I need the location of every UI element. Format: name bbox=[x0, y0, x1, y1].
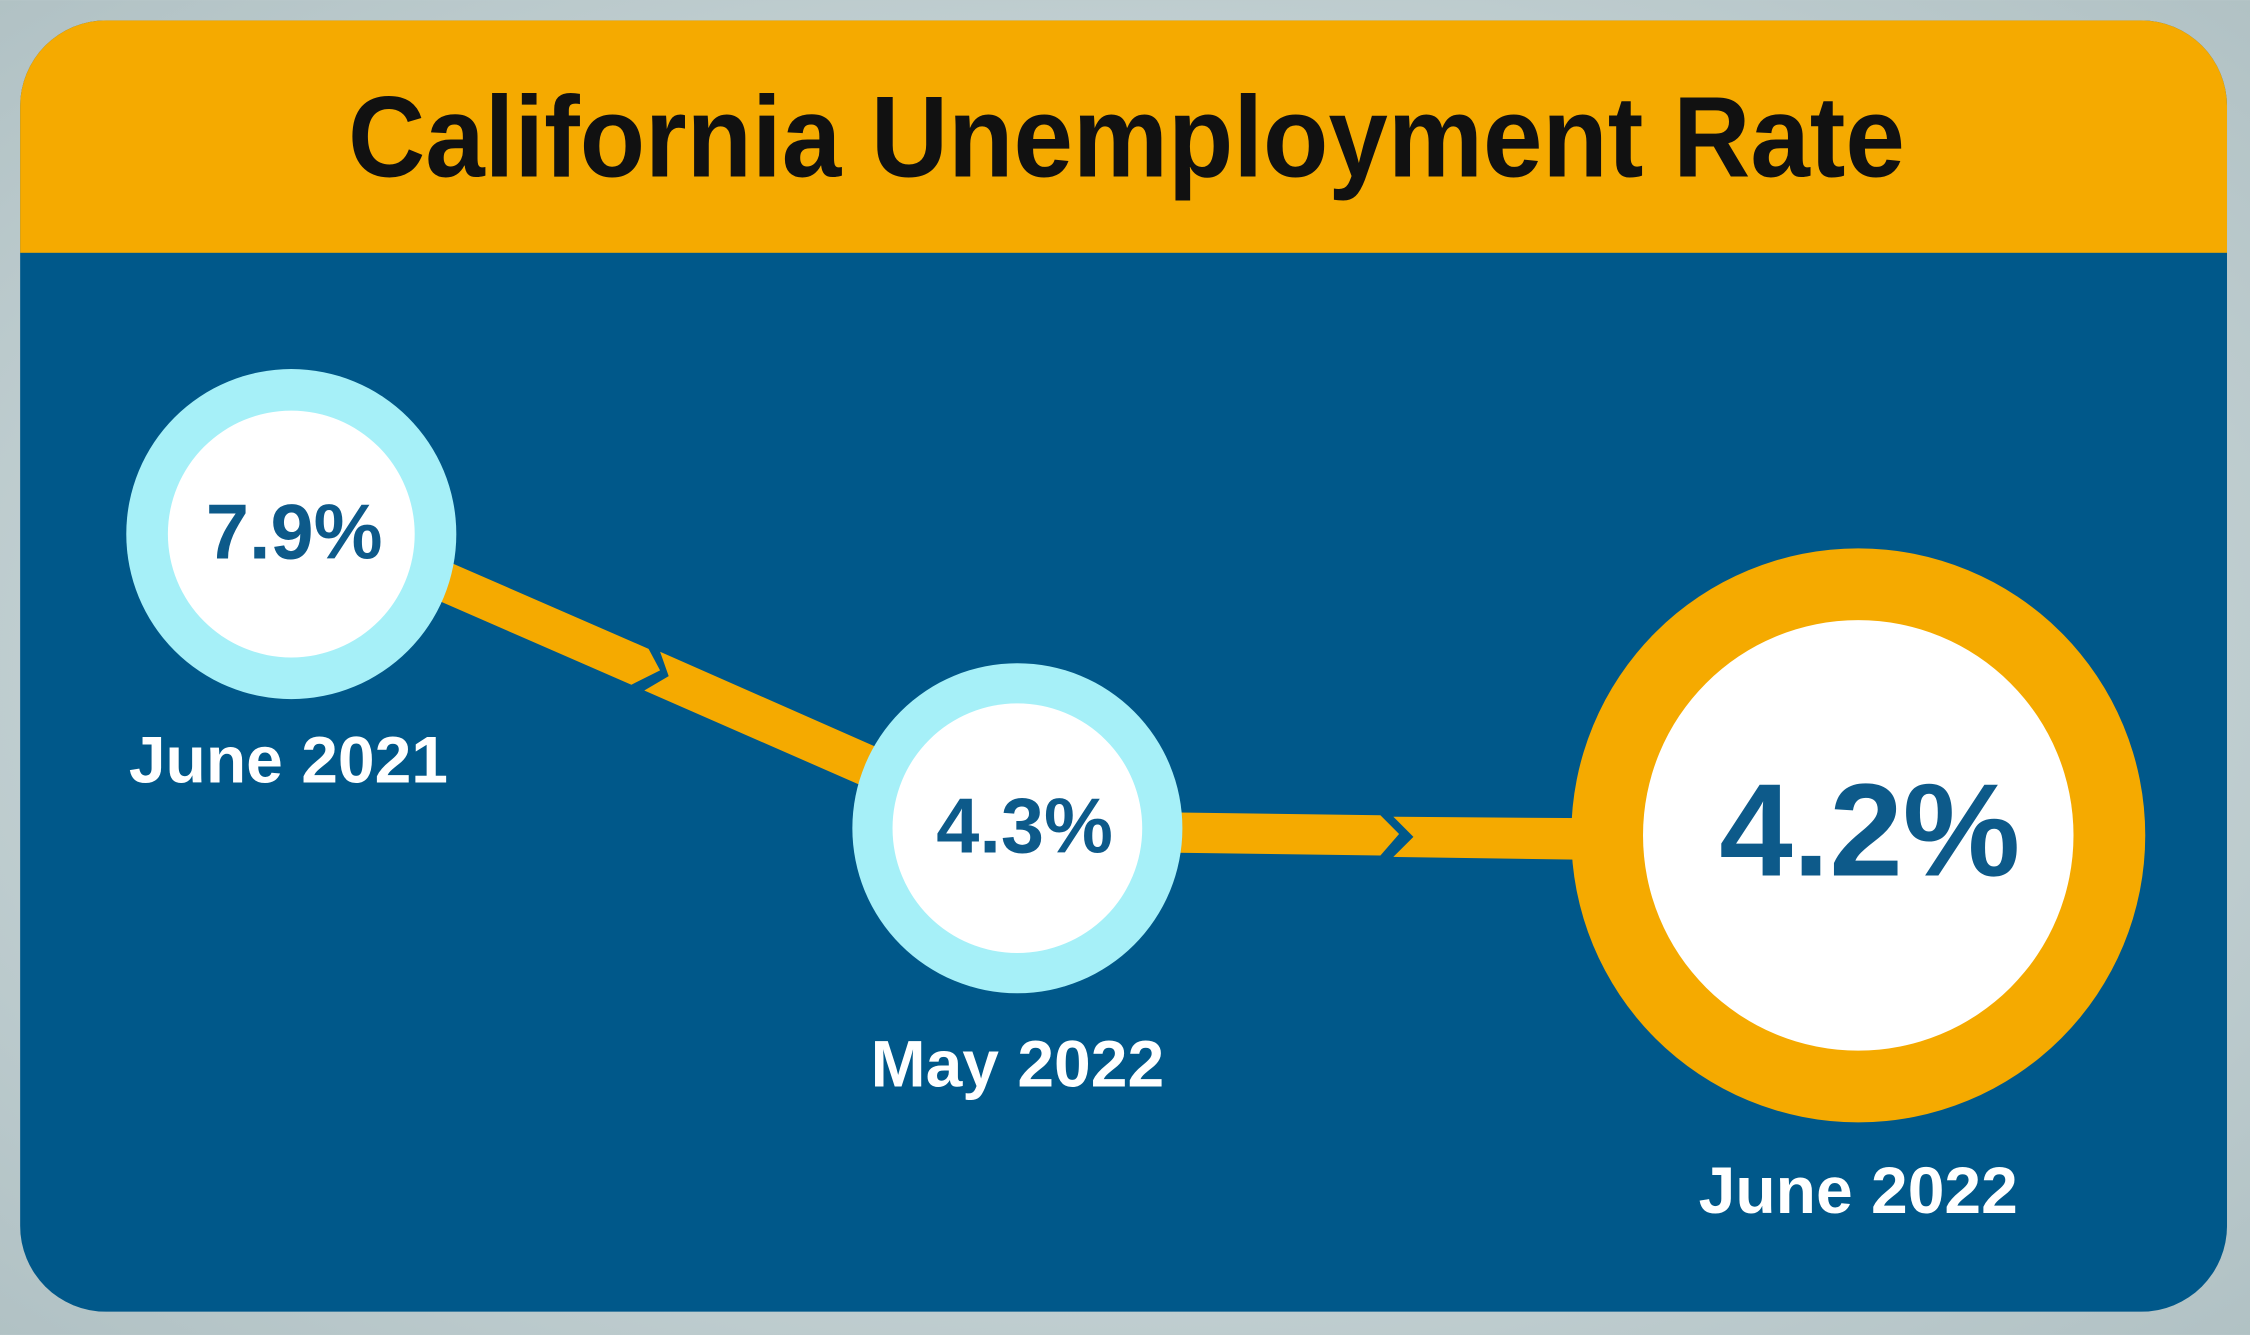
header band bbox=[20, 20, 2227, 253]
title: California Unemployment Rate bbox=[348, 74, 1905, 202]
arrow: May 2022 to June 2022 bbox=[1169, 812, 1586, 860]
arrow: June 2021 to May 2022 bbox=[430, 561, 878, 787]
circle: June 2022 4.2%: 4.2% bbox=[1719, 756, 2020, 904]
label: June 2021: June 2021 bbox=[129, 722, 448, 796]
circle: June 2021 7.9% bbox=[126, 369, 456, 699]
circle: June 2022 4.2% bbox=[1571, 548, 2145, 1122]
circle: June 2021 7.9%: 7.9% bbox=[206, 489, 382, 575]
circle: May 2022 4.3%: 4.3% bbox=[936, 784, 1113, 870]
label: May 2022: May 2022 bbox=[871, 1027, 1164, 1101]
label: June 2022: June 2022 bbox=[1699, 1153, 2018, 1227]
circle: May 2022 4.3% bbox=[852, 663, 1182, 993]
